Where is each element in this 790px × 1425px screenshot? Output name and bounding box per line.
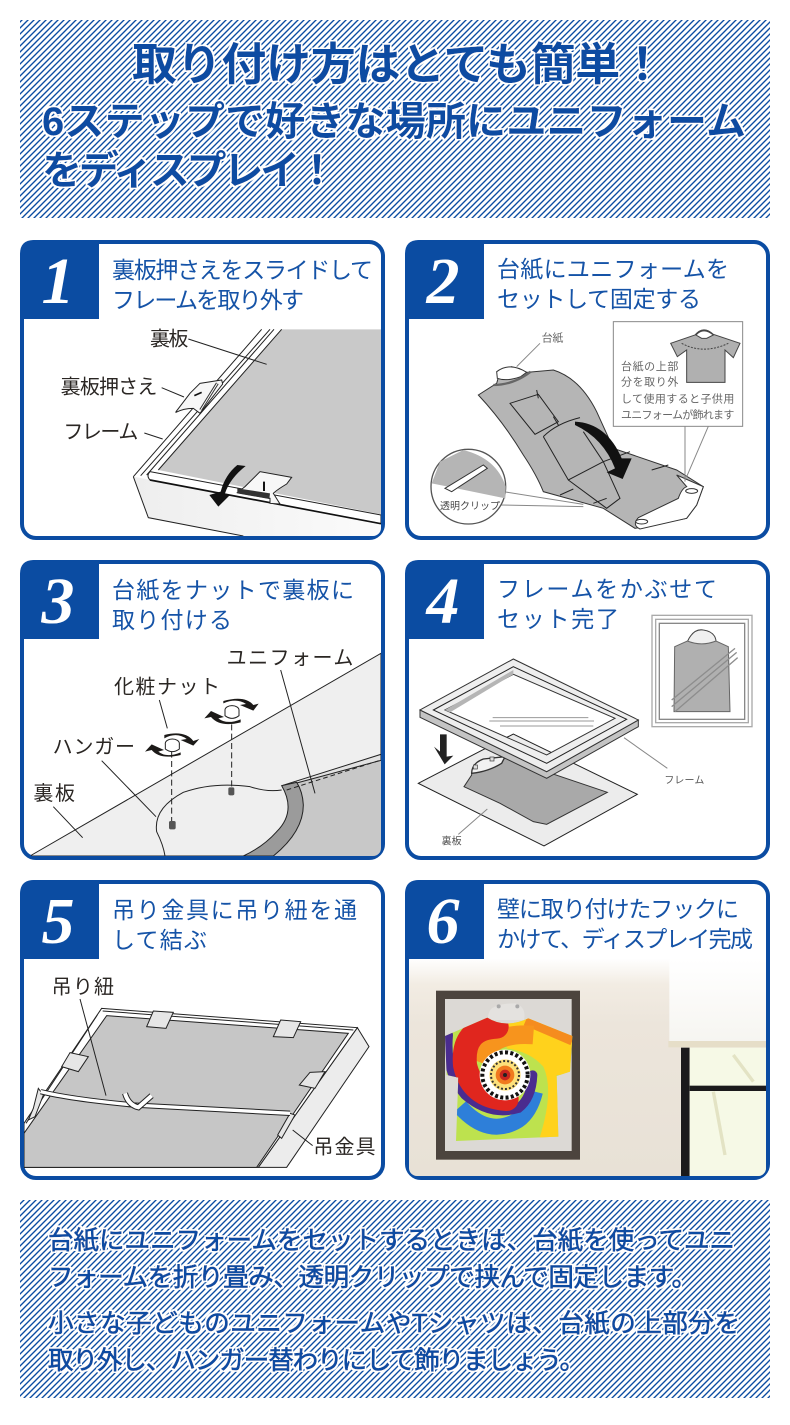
note paragraph 1	[48, 1227, 735, 1292]
step 3 heading: 台紙をナットで裏板に	[112, 577, 354, 603]
nut	[145, 733, 199, 829]
top banner	[20, 20, 770, 218]
step number 1: 1	[42, 245, 74, 318]
step 3 heading: 取り付ける	[112, 607, 232, 633]
step number 5	[20, 880, 99, 959]
step 6 heading	[497, 896, 753, 952]
illustration: folded uniform on mount: 台紙	[542, 331, 563, 345]
title line 3: をディスプレイ！	[42, 148, 337, 193]
illustration: hanging cord	[24, 975, 376, 1167]
step 3 heading	[112, 577, 354, 633]
illustration: frame over board	[418, 615, 752, 847]
clip detail: 透明クリップ	[440, 501, 500, 513]
picture frame	[436, 991, 580, 1160]
step number 3	[20, 560, 99, 639]
frame	[420, 659, 638, 778]
tie-dye shirt	[443, 1015, 573, 1143]
inset note	[613, 322, 743, 426]
step 1 heading	[112, 257, 373, 313]
step number 6	[405, 880, 484, 959]
clip detail	[431, 449, 506, 524]
illustration: frame back with slider	[61, 328, 381, 536]
cord	[41, 1092, 290, 1113]
illustration: frame over board: フレーム	[664, 774, 704, 786]
note paragraph 1: フォームを折り畳み、透明クリップで挟んで固定します。	[48, 1264, 697, 1292]
illustration: frame back with slider: 裏板押さえ	[61, 375, 157, 398]
illustration: frame over board: 裏板	[442, 834, 462, 847]
inset framed shirt	[652, 615, 752, 727]
step 1 heading: 裏板押さえをスライドして	[112, 257, 373, 283]
panel: step 1	[20, 240, 383, 538]
note paragraph 2	[48, 1310, 740, 1375]
note paragraph 1: 台紙にユニフォームをセットするときは、台紙を使ってユニ	[48, 1227, 735, 1255]
illustration: frame back with slider: 裏板	[150, 328, 188, 351]
note paragraph 2: 取り外し、ハンガー替わりにして飾りましょう。	[48, 1347, 585, 1375]
inset note: ユニフォームが飾れます	[621, 407, 734, 421]
step number 6: 6	[426, 885, 460, 958]
step number 2	[405, 240, 484, 319]
step 5 heading: 吊り金具に吊り紐を通	[112, 897, 357, 923]
step number 4	[405, 560, 484, 639]
step 2 heading: 台紙にユニフォームを	[497, 256, 729, 282]
panel: step 3	[20, 560, 383, 858]
illustration: nuts on backing board: ユニフォーム	[227, 647, 353, 669]
illustration: hanging cord: 吊金具	[313, 1135, 376, 1158]
panel: step 4	[405, 560, 768, 858]
step 5 heading: して結ぶ	[112, 927, 207, 953]
title line 2: 6ステップで好きな場所にユニフォーム	[42, 100, 746, 144]
step 1 heading: フレームを取り外す	[112, 287, 304, 313]
step 2 heading: セットして固定する	[497, 286, 701, 312]
panel: step 6	[405, 880, 768, 1178]
illustration: nuts on backing board: ハンガー	[53, 735, 135, 758]
illustration: nuts on backing board: 裏板	[33, 782, 75, 805]
illustration: hanging cord: 吊り紐	[52, 975, 114, 998]
note paragraph 2: 小さな子どものユニフォームやTシャツは、台紙の上部分を	[48, 1310, 740, 1338]
step number 5: 5	[42, 885, 74, 958]
arrow	[209, 465, 246, 507]
step number 1	[20, 240, 99, 319]
title line 1: 取り付け方はとても簡単！	[132, 39, 665, 90]
step 4 heading: セット完了	[497, 606, 619, 632]
inset note: 分を取り外	[621, 376, 678, 389]
step 6 heading: かけて、ディスプレイ完成	[497, 926, 753, 952]
step number 3: 3	[40, 565, 74, 638]
photo: framed shirt on wall	[409, 958, 766, 1176]
illustration: nuts on backing board	[32, 647, 381, 856]
step 2 heading	[497, 256, 729, 312]
arrow	[434, 734, 453, 764]
illustration: nuts on backing board: 化粧ナット	[114, 675, 220, 698]
step 4 heading	[497, 576, 717, 632]
step 5 heading	[112, 897, 357, 953]
step number 2: 2	[426, 245, 460, 318]
illustration: frame back with slider: フレーム	[63, 421, 138, 443]
inset note: 台紙の上部	[621, 359, 678, 373]
bottom note banner	[20, 1200, 770, 1398]
nut	[204, 699, 259, 795]
step 6 heading: 壁に取り付けたフックに	[497, 896, 739, 922]
inset note: して使用すると子供用	[621, 392, 734, 406]
step number 4: 4	[424, 565, 460, 638]
panel: step 5	[20, 880, 383, 1178]
metal fittings	[28, 1011, 325, 1138]
panel: step 2	[405, 240, 768, 538]
illustration: folded uniform on mount	[431, 322, 743, 529]
step 4 heading: フレームをかぶせて	[497, 576, 717, 602]
